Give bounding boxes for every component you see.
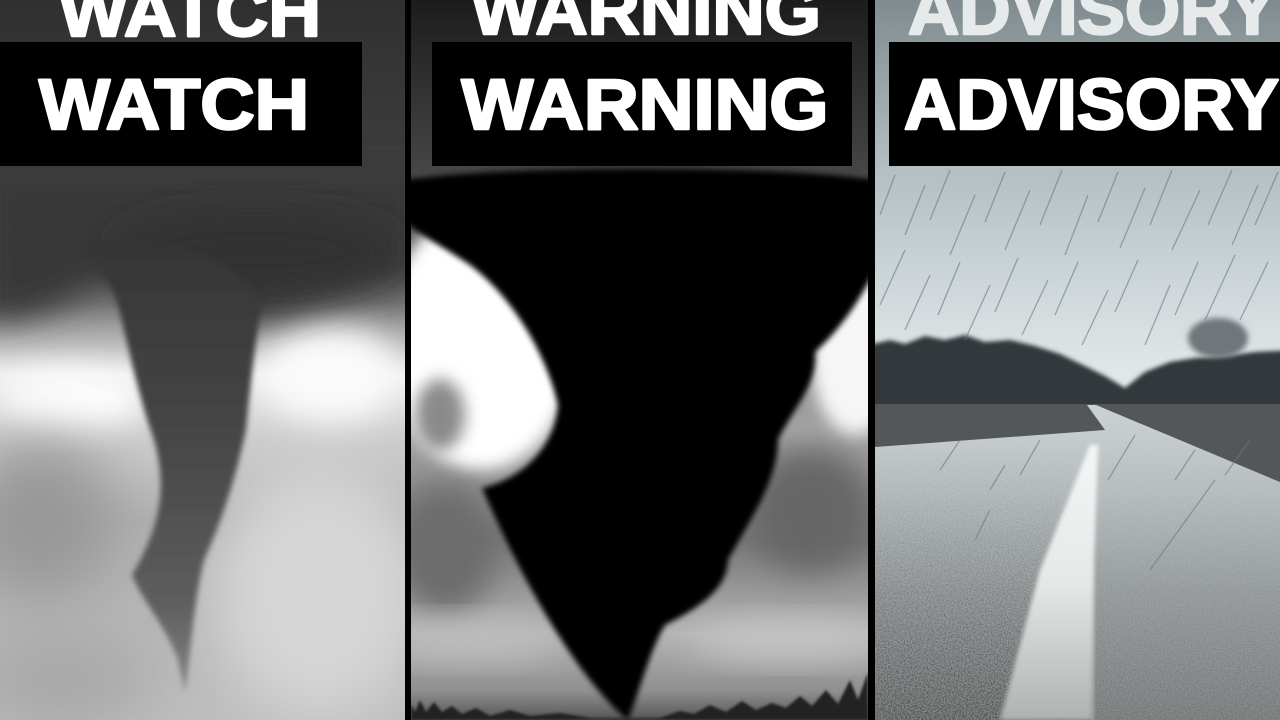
warning white sky	[411, 230, 868, 673]
advisory road right texture	[1095, 502, 1280, 720]
advisory road stripe	[1000, 445, 1098, 720]
label text: warning: WARNING	[462, 66, 828, 145]
warning tornado	[405, 169, 875, 720]
panel: watch	[0, 0, 430, 720]
watch dark cloud core	[115, 212, 395, 288]
label bar: advisory	[889, 42, 1280, 166]
advisory fields	[875, 404, 1280, 484]
panel: warning	[411, 0, 868, 720]
panel: advisory	[865, 0, 1280, 720]
label bar: warning	[432, 42, 852, 166]
advisory tree line	[865, 335, 1280, 410]
advisory road texture	[875, 440, 1090, 720]
watch storm cloud	[0, 170, 425, 322]
label text: watch: WATCH	[39, 66, 309, 145]
advisory rain	[880, 170, 1278, 570]
warning sky background	[411, 0, 868, 720]
watch sky background	[0, 0, 405, 720]
advisory road	[875, 400, 1280, 720]
watch clouds	[0, 327, 430, 720]
warning grass	[411, 672, 868, 720]
watch tornado funnel	[107, 262, 262, 689]
advisory sky	[875, 0, 1280, 405]
label text: advisory: ADVISORY	[904, 66, 1279, 145]
label bar: watch	[0, 42, 362, 166]
advisory bare tree	[1188, 318, 1248, 358]
